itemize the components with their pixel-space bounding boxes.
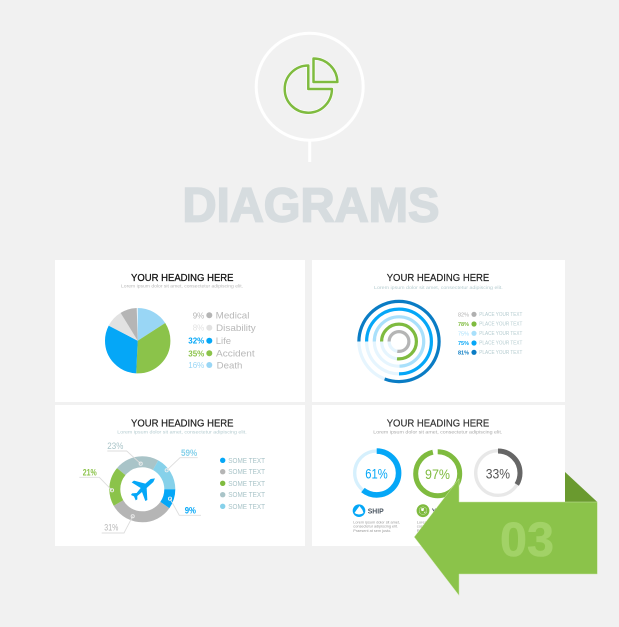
subheading: Lorem ipsum dolor sit amet, consectetur adipiscing elit.	[121, 284, 243, 290]
ring: 97%: 97%	[425, 467, 450, 482]
callout lines	[79, 451, 201, 533]
heading: YOUR HEADING HERE	[387, 417, 489, 429]
header icon badge	[256, 33, 363, 162]
heading: YOUR HEADING HERE	[131, 417, 234, 429]
ring: 61%	[355, 451, 399, 495]
ring: 33%: 33%	[486, 466, 510, 481]
legend: 9%	[193, 311, 204, 320]
body text: second item	[417, 519, 429, 533]
legend: 75%	[458, 331, 469, 337]
legend: 81%	[458, 350, 469, 356]
arrow banner	[414, 472, 597, 595]
legend	[458, 312, 522, 356]
heading: YOUR HEADING HERE	[387, 272, 489, 284]
callout values: 9%	[185, 506, 196, 517]
body text: ship: Lorem ipsum dolor sit amet,	[353, 519, 400, 524]
legend: SOME TEXT	[228, 504, 266, 511]
legend: 82%	[458, 312, 469, 318]
title: DIAGRAMS	[182, 178, 440, 232]
legend: 75%	[458, 341, 469, 347]
legend: 32%	[188, 337, 204, 346]
legend	[220, 458, 266, 511]
subheading: Lorem ipsum dolor sit amet, consectetur adipiscing elit.	[117, 430, 247, 436]
legend: SOME TEXT	[228, 458, 266, 465]
legend: PLACE YOUR TEXT	[479, 350, 522, 356]
callout values: 31%	[104, 522, 119, 533]
callout values	[83, 441, 198, 533]
body text: second item: Praes	[417, 528, 427, 533]
label: ship: SHIP	[368, 509, 384, 516]
donut chart	[115, 462, 170, 517]
callout values: 23%	[107, 441, 124, 452]
legend: PLACE YOUR TEXT	[479, 322, 522, 328]
icon: pie chart outline	[285, 58, 337, 113]
body text: ship: Praesent at sem justo.	[353, 528, 391, 533]
legend: Life	[216, 336, 231, 347]
number: 03	[500, 514, 554, 567]
ring: 33%	[476, 451, 520, 495]
ring: 61%: 61%	[365, 466, 388, 481]
panel: pie chart	[55, 260, 305, 402]
label: second item: YACHT	[432, 509, 456, 516]
legend: SOME TEXT	[228, 492, 266, 499]
callout values: 59%	[181, 448, 198, 459]
legend: Accident	[216, 349, 255, 360]
legend: Disability	[216, 323, 256, 334]
legend: 16%	[188, 361, 204, 370]
legend: PLACE YOUR TEXT	[479, 331, 522, 337]
legend: 8%	[193, 324, 204, 333]
legend: Medical	[216, 311, 249, 322]
legend: SOME TEXT	[228, 481, 266, 488]
callout values: 21%	[83, 467, 97, 478]
legend: 35%	[188, 349, 204, 358]
body text: second item: consec	[417, 524, 429, 529]
icon: airplane	[131, 478, 155, 501]
ring chart	[359, 301, 439, 382]
icon: globe badge	[418, 506, 428, 516]
heading: YOUR HEADING HERE	[131, 272, 234, 284]
legend: SOME TEXT	[228, 469, 266, 476]
subheading: Lorem ipsum dolor sit amet, consectetur adipiscing elit.	[374, 285, 503, 291]
icon: ship badge	[353, 504, 365, 517]
body text: second item: Lorem	[417, 519, 429, 524]
body text: ship: consectetur adipiscing elit.	[353, 524, 398, 529]
ring: 97%	[416, 452, 460, 496]
legend: Death	[217, 360, 242, 371]
panel: progress rings	[312, 405, 565, 546]
banner fold	[565, 472, 597, 502]
panel: concentric rings	[312, 260, 565, 402]
legend: PLACE YOUR TEXT	[479, 312, 522, 318]
subheading: Lorem ipsum dolor sit amet, consectetur adipiscing elit.	[373, 430, 502, 436]
pie chart	[121, 324, 154, 357]
body text: ship	[353, 519, 400, 533]
legend: PLACE YOUR TEXT	[479, 341, 522, 347]
legend: 78%	[458, 322, 469, 328]
panel: donut with plane	[55, 405, 305, 546]
legend	[188, 311, 256, 371]
arrow shape	[414, 479, 597, 595]
